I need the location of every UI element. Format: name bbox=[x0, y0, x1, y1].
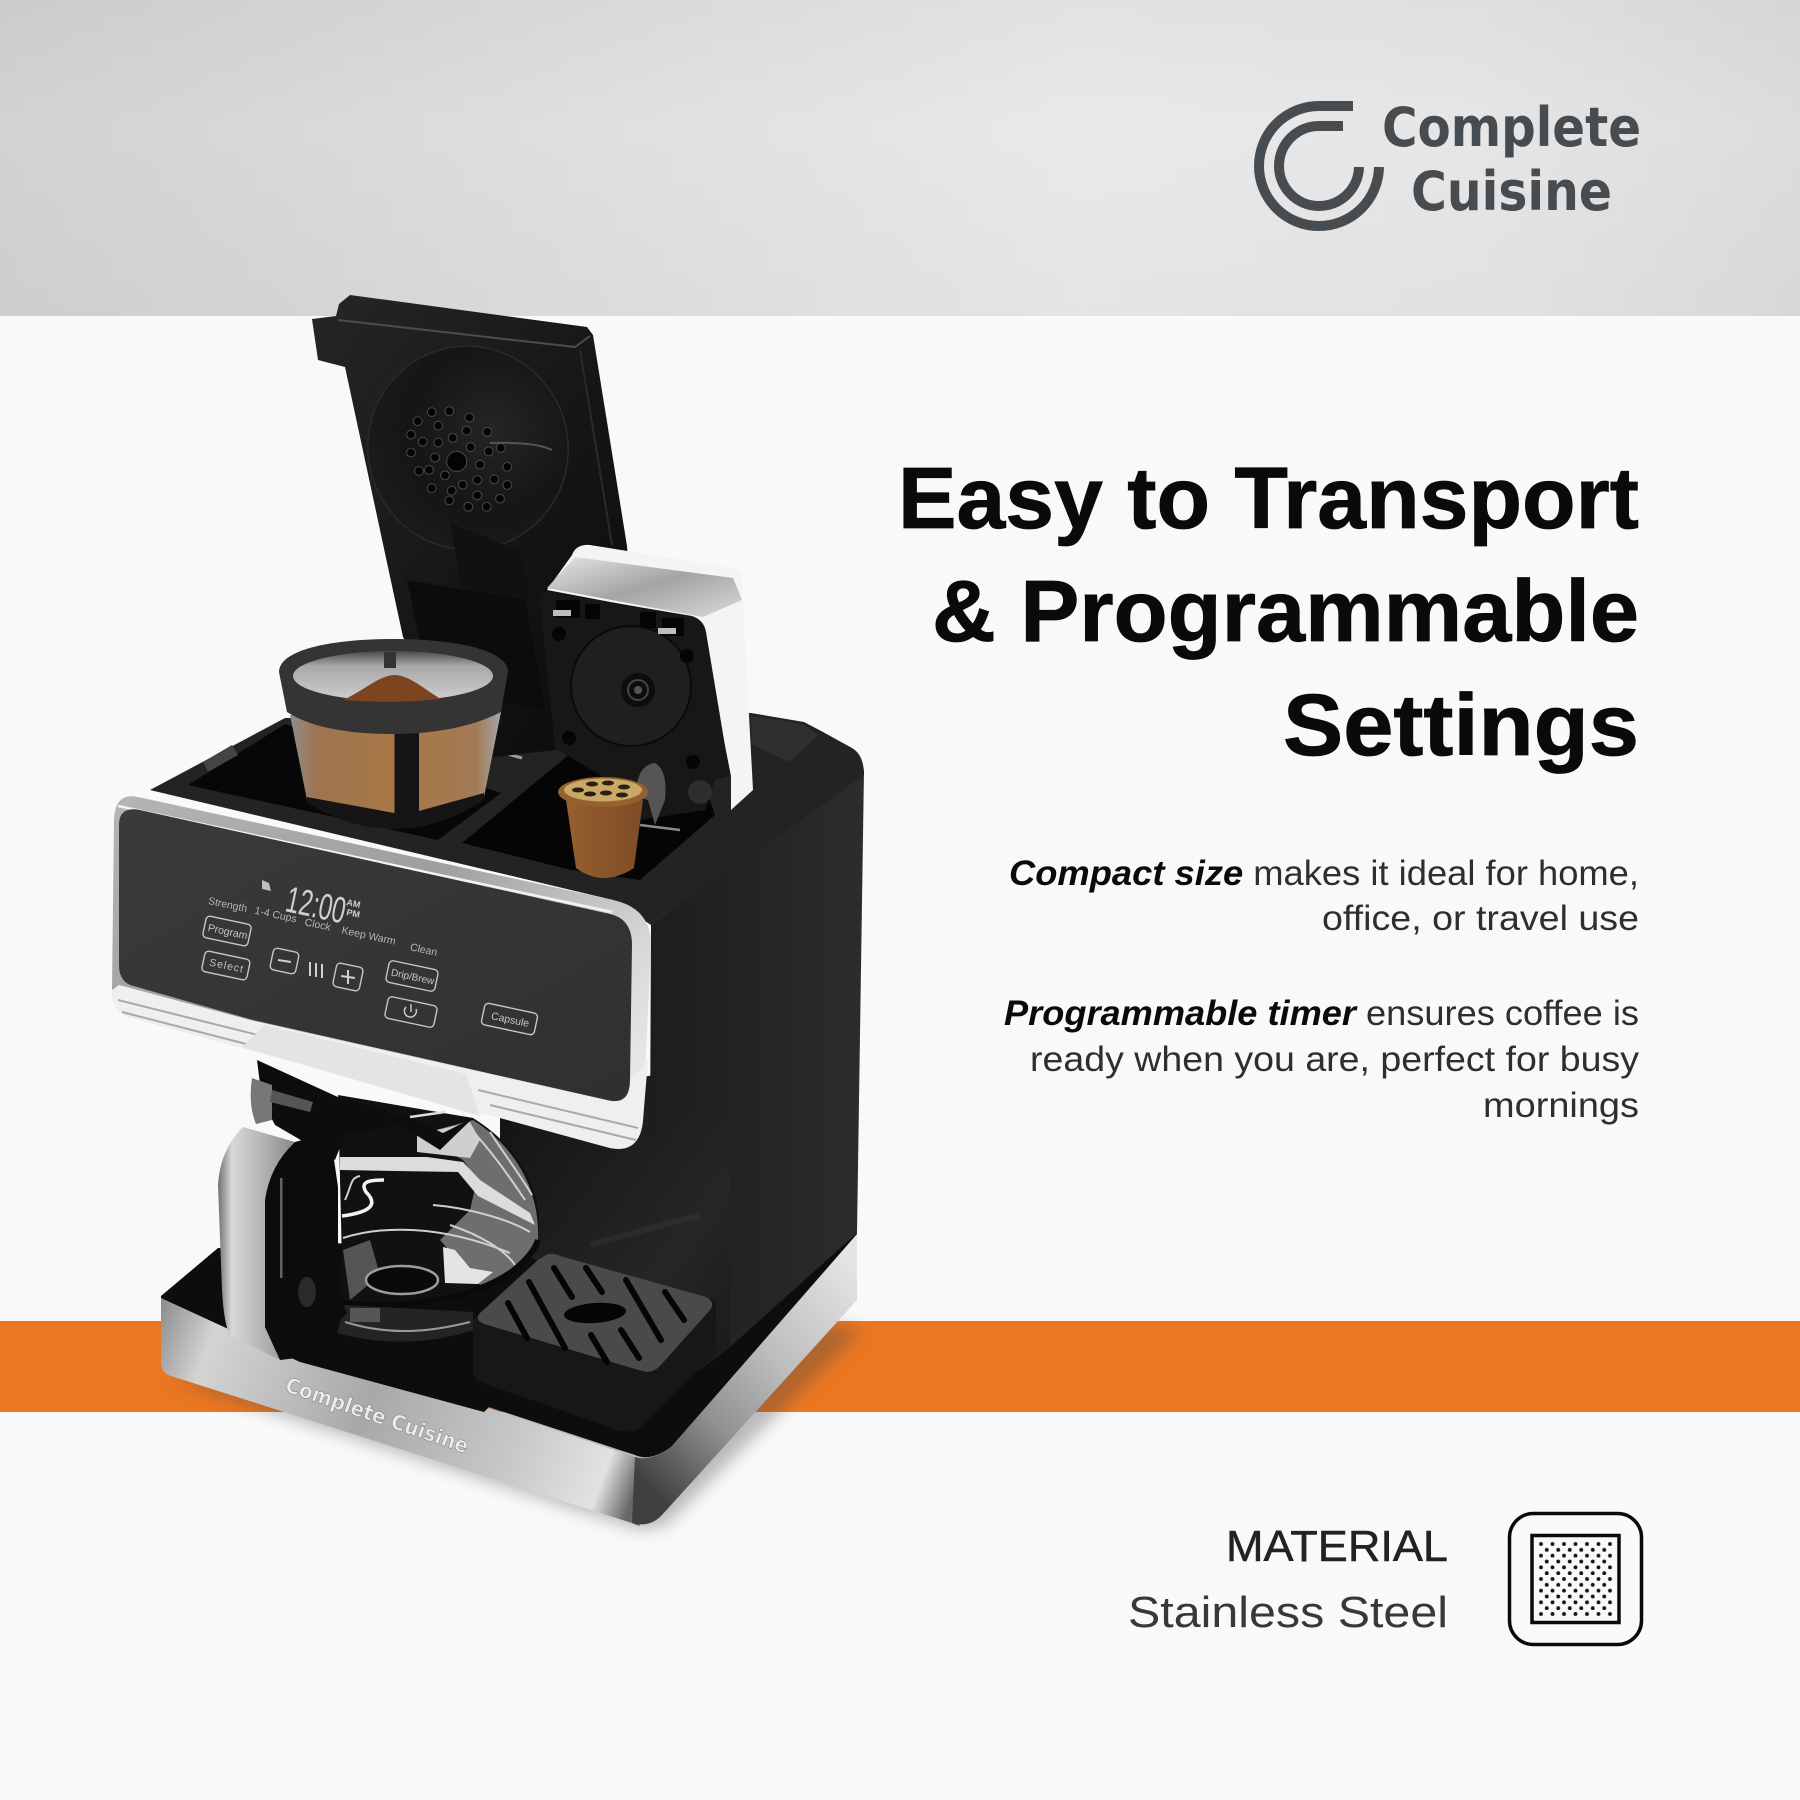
logo mark: concentric C rings bbox=[1259, 106, 1379, 226]
capsule brew module bbox=[540, 545, 753, 830]
mesh filter basket with coffee grounds bbox=[279, 639, 508, 829]
lid shower disc bbox=[341, 320, 595, 576]
control panel fascia bbox=[112, 796, 651, 1149]
panel buttons bbox=[201, 915, 538, 1035]
module disc bbox=[571, 626, 691, 746]
tray slots bbox=[508, 1268, 684, 1362]
tower body bbox=[500, 770, 864, 1370]
logo: Complete Cuisine bbox=[1259, 96, 1641, 226]
basket mesh bbox=[290, 712, 501, 827]
base top black tray bbox=[161, 1225, 857, 1457]
orange accent band bbox=[0, 1321, 1800, 1412]
feature text: compact size: office, or travel use bbox=[1322, 899, 1639, 938]
panel button labels: Capsule bbox=[490, 1010, 530, 1030]
panel mode labels: Strength bbox=[207, 895, 248, 915]
icon: clock bell bbox=[262, 880, 271, 891]
clock display: 12:00 bbox=[282, 879, 350, 931]
logo wordmark: Complete bbox=[1382, 96, 1641, 159]
heading bbox=[898, 450, 1639, 774]
ridged trim bbox=[118, 1000, 638, 1140]
logo wordmark bbox=[1382, 96, 1641, 223]
panel button labels: Drip/Brew bbox=[390, 968, 436, 988]
feature text: programmable timer: Programmable timer ensures coffee is bbox=[1004, 994, 1639, 1033]
panel mode labels: Clock bbox=[304, 916, 332, 934]
brushed metal header band bbox=[0, 0, 1800, 316]
display glass bbox=[119, 809, 632, 1101]
feature text: programmable timer: ready when you are, perfect for busy bbox=[1030, 1040, 1640, 1079]
heading: Easy to Transport bbox=[898, 450, 1639, 547]
carafe lid bbox=[257, 1060, 473, 1160]
carafe bottom ring bbox=[366, 1266, 438, 1294]
capsule module front face bbox=[540, 592, 730, 820]
coffee capsule bbox=[558, 777, 648, 878]
AM PM marks: PM bbox=[346, 907, 361, 920]
hinge rods bbox=[493, 722, 540, 758]
feature text: compact size bbox=[1009, 854, 1639, 938]
drip tray bbox=[473, 1254, 716, 1432]
panel mode labels: Clean bbox=[409, 941, 438, 959]
filter well bbox=[188, 724, 501, 840]
basket rim bbox=[279, 639, 508, 734]
material label: MATERIAL bbox=[1226, 1522, 1448, 1571]
icon: material texture bbox=[1510, 1514, 1642, 1644]
stainless steel base bbox=[161, 1225, 857, 1526]
panel mode labels bbox=[207, 895, 438, 959]
base shadow bbox=[170, 1320, 862, 1530]
capsule well bbox=[462, 753, 715, 880]
upper housing top surface bbox=[150, 713, 864, 925]
panel symbols bbox=[278, 960, 416, 1017]
coffee maker product illustration bbox=[112, 295, 864, 1530]
coffee grounds heap bbox=[343, 675, 441, 702]
glass carafe bbox=[218, 1060, 539, 1360]
heading: & Programmable bbox=[932, 563, 1639, 660]
heading: Settings bbox=[1283, 677, 1639, 774]
lid shower holes bbox=[407, 407, 512, 511]
panel button labels bbox=[207, 922, 530, 1030]
material label: Stainless Steel bbox=[1128, 1588, 1448, 1637]
panel mode labels: Keep Warm bbox=[340, 924, 397, 948]
carafe silver handle bbox=[218, 1127, 295, 1360]
panel mode labels: 1-4 Cups bbox=[254, 905, 298, 925]
AM PM marks: AM bbox=[346, 897, 361, 910]
embossed base brand: Complete Cuisine bbox=[282, 1373, 472, 1458]
panel button labels: Program bbox=[207, 922, 249, 942]
AM PM marks bbox=[346, 897, 361, 920]
feature text: programmable timer bbox=[1004, 994, 1640, 1125]
panel button labels: Select bbox=[208, 957, 245, 976]
carafe glass body bbox=[338, 1095, 539, 1304]
material label bbox=[1128, 1522, 1448, 1637]
feature text: compact size: Compact size makes it ideal for home, bbox=[1009, 854, 1639, 893]
logo wordmark: Cuisine bbox=[1411, 160, 1612, 223]
feature text: programmable timer: mornings bbox=[1483, 1086, 1639, 1125]
capsule lid beans bbox=[572, 780, 630, 798]
open reservoir lid bbox=[312, 295, 640, 760]
